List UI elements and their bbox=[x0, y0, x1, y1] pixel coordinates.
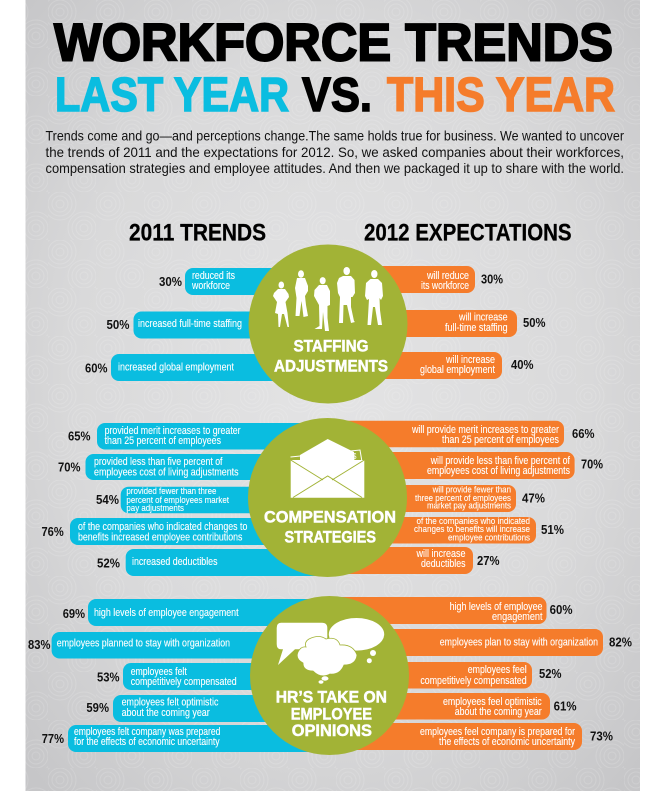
icon: speech and thought bubbles bbox=[277, 618, 384, 684]
circle heading: HR's take on employee opinions: OPINIONS bbox=[292, 721, 372, 740]
bar 2012: deductibles 27%: will increase bbox=[416, 548, 466, 560]
panel: HR's take on employee opinions bbox=[28, 596, 632, 755]
panel: staffing adjustments bbox=[85, 244, 546, 404]
bar 2011: stay with organization 83%: 83% bbox=[28, 638, 50, 652]
bar 2012: global employment 40%: global employment bbox=[420, 364, 495, 376]
circle heading: staffing adjustments: ADJUSTMENTS bbox=[274, 357, 388, 376]
bar 2012: cost of living 70%: employees cost of living adjustments bbox=[427, 465, 570, 477]
bar 2011: optimistic 59%: about the coming year bbox=[122, 707, 210, 719]
compensation circle bbox=[248, 418, 407, 577]
intro paragraph: compensation strategies and employee attitudes. And then we packaged it up to share with the world. bbox=[46, 160, 624, 176]
bar 2011: reduced workforce 30%: workforce bbox=[191, 280, 230, 292]
bar 2012: employee contributions 51% bbox=[326, 516, 564, 544]
bar 2011: employee contributions 76%: 76% bbox=[42, 525, 64, 539]
bar 2012: market pay 47% bbox=[326, 485, 545, 512]
title: THIS YEAR bbox=[387, 69, 615, 122]
bar 2011: merit increases 65% bbox=[68, 423, 329, 450]
intro paragraph: the trends of 2011 and the expectations for 2012. So, we asked companies about their workforces, bbox=[46, 144, 624, 160]
bar 2012: global employment 40% bbox=[326, 352, 534, 379]
opinions circle bbox=[250, 596, 409, 755]
bar 2011: merit increases 65%: provided merit increases to greater bbox=[105, 425, 241, 437]
bar 2012: engagement 60% bbox=[326, 597, 572, 624]
bar 2011: economic uncertainty 77% bbox=[42, 725, 329, 752]
bar 2012: merit increases 66%: 66% bbox=[572, 427, 594, 441]
bar 2011: deductibles 52%: 52% bbox=[97, 557, 120, 571]
bar 2012: full-time staffing 50%: 50% bbox=[523, 316, 546, 330]
bar 2012: economic uncertainty 73%: the effects of economic uncertainty bbox=[439, 736, 575, 748]
bar 2012: merit increases 66%: will provide merit increases to greater bbox=[411, 424, 559, 436]
bar 2012: reduce workforce 30% bbox=[326, 266, 503, 293]
bar 2012: cost of living 70%: 70% bbox=[581, 458, 603, 472]
bar 2012: merit increases 66%: than 25 percent of employees bbox=[442, 434, 559, 446]
bar 2011: stay with organization 83%: employees planned to stay with organization bbox=[57, 638, 230, 650]
bar 2012: optimistic 61% bbox=[326, 693, 576, 720]
bar 2012: compensated 52% bbox=[326, 662, 562, 688]
bar 2012: market pay 47%: will provide fewer than bbox=[432, 485, 511, 496]
bar 2011: economic uncertainty 77%: for the effects of economic uncertainty bbox=[74, 736, 220, 748]
bar 2011: engagement 69%: high levels of employee engagement bbox=[94, 607, 239, 619]
bar 2011: global employment 60%: 60% bbox=[85, 362, 108, 376]
bar 2011: market pay 54%: percent of employees market bbox=[126, 495, 229, 506]
bar 2012: deductibles 27%: 27% bbox=[477, 554, 500, 568]
intro paragraph bbox=[46, 128, 624, 176]
bar 2011: optimistic 59%: employees felt optimistic bbox=[122, 697, 219, 709]
bar 2011: market pay 54%: provided fewer than three bbox=[126, 486, 216, 497]
title bbox=[54, 14, 615, 122]
bar 2012: economic uncertainty 73% bbox=[326, 723, 613, 750]
circle heading: compensation strategies: COMPENSATION bbox=[264, 508, 396, 527]
bar 2012: compensated 52%: 52% bbox=[539, 667, 562, 681]
bar 2012: cost of living 70% bbox=[326, 452, 603, 479]
bar 2011: reduced workforce 30%: 30% bbox=[159, 275, 182, 289]
bar 2011: full-time staffing 50% bbox=[106, 312, 330, 338]
icon: envelope with money bbox=[290, 439, 364, 498]
circle heading: HR's take on employee opinions: EMPLOYEE bbox=[291, 704, 372, 724]
bar 2011: stay with organization 83% bbox=[28, 632, 329, 658]
circle heading: compensation strategies: STRATEGIES bbox=[284, 528, 376, 547]
bar 2011: reduced workforce 30%: reduced its bbox=[192, 270, 235, 282]
bar 2012: market pay 47%: market pay adjustments bbox=[427, 501, 511, 512]
bar 2012: market pay 47%: three percent of employees bbox=[415, 493, 511, 504]
bar 2011: engagement 69%: 69% bbox=[63, 607, 85, 621]
circle heading: staffing adjustments: STAFFING bbox=[294, 337, 368, 356]
bar 2011: deductibles 52% bbox=[97, 549, 329, 576]
bar 2011: market pay 54%: 54% bbox=[96, 493, 119, 507]
bar 2011: employee contributions 76%: of the companies who indicated changes to bbox=[78, 521, 247, 533]
bar 2011: full-time staffing 50%: 50% bbox=[106, 318, 130, 332]
bar 2011: merit increases 65%: than 25 percent of employees bbox=[105, 435, 221, 447]
bar 2012: full-time staffing 50%: full-time staffing bbox=[445, 322, 508, 334]
bar 2011: compensated 53%: employees felt bbox=[131, 666, 187, 678]
bar 2011: cost of living 70%: provided less than five percent of bbox=[94, 456, 223, 468]
bar 2012: stay with organization 82%: employees plan to stay with organization bbox=[440, 637, 598, 649]
bar 2011: compensated 53%: 53% bbox=[97, 671, 120, 685]
bar 2011: economic uncertainty 77%: 77% bbox=[42, 732, 64, 746]
bar 2012: employee contributions 51%: employee contributions bbox=[448, 533, 530, 544]
bar 2011: global employment 60% bbox=[85, 354, 329, 381]
bar 2012: economic uncertainty 73%: 73% bbox=[590, 730, 613, 744]
icon: people silhouettes bbox=[273, 267, 383, 331]
bar 2012: compensated 52%: competitively compensated bbox=[420, 675, 527, 687]
bar 2012: stay with organization 82% bbox=[326, 629, 632, 656]
title: WORKFORCE TRENDS bbox=[54, 14, 613, 72]
bar 2012: engagement 60%: engagement bbox=[492, 611, 542, 623]
bar 2012: merit increases 66% bbox=[326, 421, 594, 447]
column heading: 2012 expectations: 2012 EXPECTATIONS bbox=[364, 220, 572, 247]
bar 2011: compensated 53% bbox=[97, 663, 329, 690]
bar 2011: cost of living 70%: 70% bbox=[58, 461, 80, 475]
circle heading: staffing adjustments bbox=[274, 337, 388, 376]
title: VS. bbox=[302, 69, 372, 122]
bar 2011: optimistic 59% bbox=[86, 695, 329, 722]
bar 2012: optimistic 61%: 61% bbox=[554, 700, 576, 714]
bar 2012: full-time staffing 50% bbox=[326, 310, 546, 337]
bar 2011: cost of living 70% bbox=[58, 454, 328, 480]
bar 2012: reduce workforce 30%: will reduce bbox=[426, 270, 469, 282]
bar 2011: global employment 60%: increased global employment bbox=[118, 362, 234, 374]
bar 2011: engagement 69% bbox=[63, 599, 329, 626]
bar 2012: optimistic 61%: employees feel optimistic bbox=[443, 696, 542, 708]
circle heading: compensation strategies bbox=[264, 508, 396, 547]
bar 2011: merit increases 65%: 65% bbox=[68, 430, 90, 444]
staffing circle bbox=[248, 244, 408, 404]
bar 2011: full-time staffing 50%: increased full-time staffing bbox=[138, 318, 242, 330]
bar 2012: reduce workforce 30%: its workforce bbox=[421, 280, 469, 292]
bar 2012: global employment 40%: will increase bbox=[445, 354, 495, 366]
bar 2011: reduced workforce 30% bbox=[159, 268, 330, 295]
bar 2011: compensated 53%: competitively compensated bbox=[131, 676, 237, 688]
bar 2012: employee contributions 51%: of the companies who indicated bbox=[416, 516, 530, 527]
circle heading: HR's take on employee opinions: HR’S TAKE ON bbox=[276, 688, 387, 707]
title: LAST YEAR bbox=[55, 69, 289, 122]
bar 2012: economic uncertainty 73%: employees feel company is prepared for bbox=[420, 726, 575, 738]
bar 2011: employee contributions 76%: benefits increased employee contributions bbox=[78, 532, 243, 544]
panel: compensation strategies bbox=[42, 418, 603, 577]
bar 2012: employee contributions 51%: 51% bbox=[541, 523, 564, 537]
bar 2012: deductibles 27%: deductibles bbox=[421, 558, 466, 570]
bar 2012: optimistic 61%: about the coming year bbox=[455, 706, 542, 718]
bar 2012: engagement 60%: 60% bbox=[550, 603, 572, 617]
circle heading: HR's take on employee opinions bbox=[276, 688, 387, 740]
bar 2011: optimistic 59%: 59% bbox=[86, 701, 109, 715]
bar 2011: market pay 54%: pay adjustments bbox=[126, 503, 184, 514]
bar 2011: cost of living 70%: employees cost of living adjustments bbox=[94, 467, 239, 479]
bar 2012: market pay 47%: 47% bbox=[522, 492, 545, 506]
bar 2011: deductibles 52%: increased deductibles bbox=[132, 556, 218, 568]
bar 2012: reduce workforce 30%: 30% bbox=[481, 273, 503, 287]
bar 2012: cost of living 70%: will provide less than five percent of bbox=[430, 455, 571, 467]
bar 2012: stay with organization 82%: 82% bbox=[609, 636, 632, 650]
bar 2012: full-time staffing 50%: will increase bbox=[458, 312, 508, 324]
bar 2012: global employment 40%: 40% bbox=[511, 358, 534, 372]
bar 2012: engagement 60%: high levels of employee bbox=[450, 601, 542, 613]
bar 2012: deductibles 27% bbox=[326, 547, 500, 574]
bar 2011: market pay 54% bbox=[96, 486, 329, 514]
column heading: 2011 trends: 2011 TRENDS bbox=[129, 220, 266, 247]
bar 2011: employee contributions 76% bbox=[42, 518, 328, 545]
bar 2012: employee contributions 51%: changes to benefits will increase bbox=[414, 524, 530, 535]
bar 2011: economic uncertainty 77%: employees felt company was prepared bbox=[74, 726, 220, 738]
bar 2012: compensated 52%: employees feel bbox=[468, 664, 527, 676]
icon: envelope with money: $ bbox=[352, 452, 357, 461]
